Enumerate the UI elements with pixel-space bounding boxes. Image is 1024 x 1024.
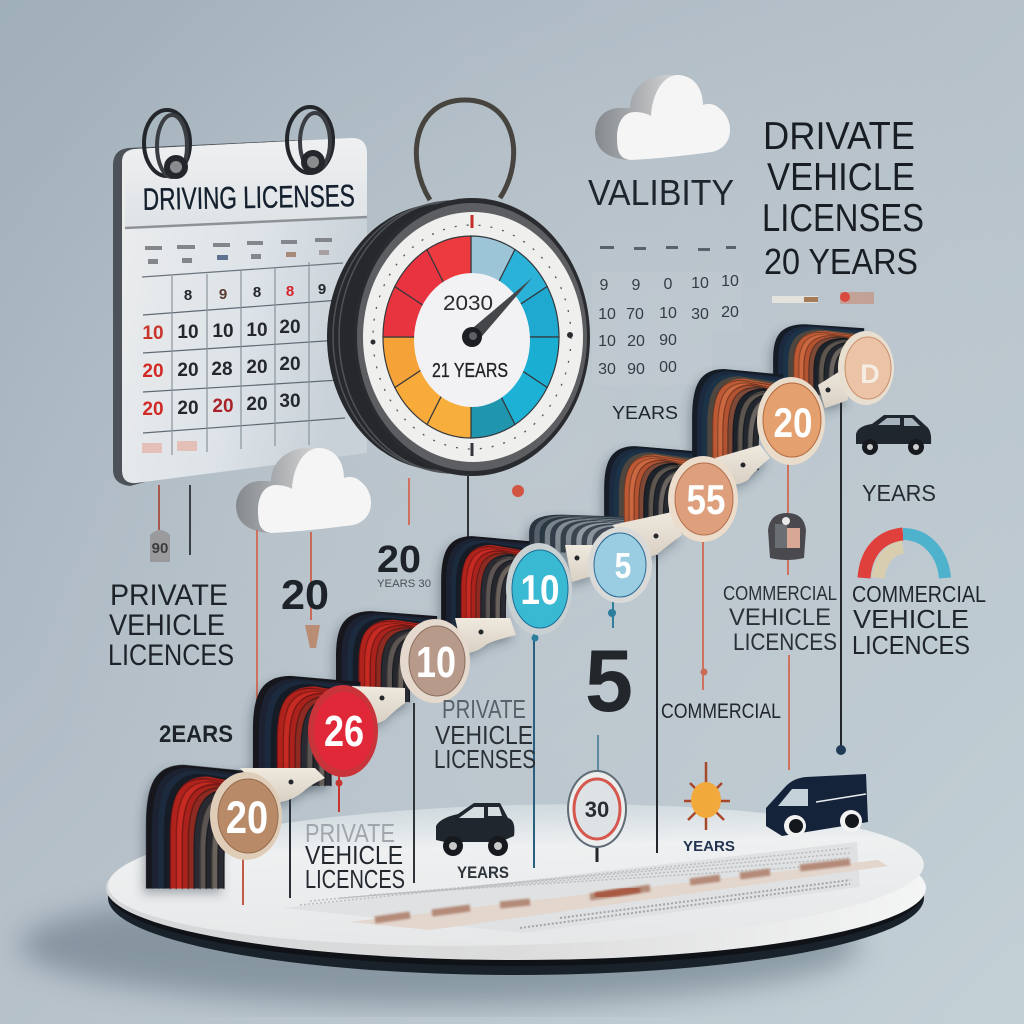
label center private: LICENSES [434, 744, 536, 774]
badges [210, 331, 894, 860]
heading: validity: VALIBITY [588, 172, 734, 213]
badge 5 [588, 527, 652, 603]
calendar numbers: 10 [212, 321, 234, 342]
faint small calendar: 20 [721, 304, 739, 321]
calendar grid [142, 262, 345, 455]
gauge needle [468, 278, 532, 342]
calendar [113, 107, 367, 486]
badge 10 blue [506, 543, 572, 635]
printed sheet on platform [283, 842, 888, 933]
badge 0 [838, 331, 894, 405]
stacked cards [150, 327, 867, 889]
heading: private vehicle licenses 20 years: LICENSES [762, 197, 924, 240]
label 2ears: 2EARS [159, 721, 233, 748]
ribbon 4 [565, 545, 595, 582]
faint small calendar: 30 [598, 361, 616, 378]
calendar numbers: 30 [279, 391, 301, 412]
badge 0: D [860, 359, 880, 389]
faint calendar red dates [142, 441, 197, 453]
icon: car top right [856, 415, 931, 455]
calendar header: DRIVING LICENSES [143, 178, 355, 217]
calendar numbers: 8 [184, 287, 192, 304]
gauge ticks [373, 225, 571, 449]
badge 26 [308, 685, 378, 777]
number 20 center: 20 [377, 539, 421, 581]
label commercial vehicle licences 2: LICENCES [852, 630, 970, 660]
ribbon 2 [352, 686, 405, 724]
calendar header [125, 138, 367, 228]
gauge ring handle [416, 100, 514, 200]
cloud middle [236, 448, 371, 533]
faint small calendar: 10 [598, 333, 616, 350]
icon: sun [684, 762, 730, 830]
calendar numbers: 20 [142, 399, 164, 420]
calendar numbers: 9 [318, 281, 326, 298]
ribbons [240, 368, 848, 803]
badge 55: 55 [687, 477, 725, 524]
faint sign 90: 90 [152, 540, 168, 557]
faint small calendar: 30 [691, 306, 709, 323]
heading: private vehicle licenses 20 years: DRIVATE [763, 115, 915, 158]
heading: private vehicle licenses 20 years: VEHICLE [767, 156, 915, 199]
platform shadow [20, 885, 860, 1005]
calendar numbers: 10 [246, 320, 268, 341]
heading: private vehicle licenses 20 years: 20 YEARS [764, 241, 918, 282]
badge 20 orange: 20 [774, 400, 812, 447]
label commercial vehicle licences 2: VEHICLE [853, 604, 969, 634]
label commercial vehicle licences 1: VEHICLE [729, 604, 831, 631]
calendar numbers: 10 [142, 323, 164, 344]
stack 3 [339, 614, 440, 703]
stopwatch gauge [327, 100, 590, 476]
icon: speed sign: 30 [585, 797, 609, 822]
faint small calendar: 9 [632, 277, 641, 294]
calendar numbers: 20 [279, 354, 301, 375]
badge 20 [210, 772, 282, 860]
faint small calendar: 0 [664, 276, 673, 293]
label: years (top): YEARS [612, 403, 678, 423]
faint small calendar: 20 [627, 333, 645, 350]
number 20 left: 20 [281, 571, 329, 618]
calendar numbers: 20 [246, 394, 268, 415]
left label [108, 579, 234, 672]
calendar numbers: 20 [142, 361, 164, 382]
number 20 center: YEARS 30 [377, 578, 431, 590]
icon: speed sign [567, 770, 627, 848]
faint small calendar: 90 [659, 332, 677, 349]
badge 10 [400, 619, 470, 703]
badge 5: 5 [615, 546, 631, 587]
icon: device [768, 513, 806, 560]
connector pins [305, 485, 846, 786]
calendar numbers: 20 [177, 360, 199, 381]
faint small calendar: 10 [691, 275, 709, 292]
label bottom: LICENCES [305, 864, 405, 894]
icon: van [766, 774, 868, 837]
ribbon 3 [455, 618, 516, 653]
ribbon 5 [612, 512, 682, 556]
calendar numbers: 9 [219, 286, 227, 303]
label bottom [305, 818, 405, 894]
faint small calendar: 10 [659, 305, 677, 322]
left label: VEHICLE [109, 609, 225, 642]
faint sign 90 [150, 530, 170, 562]
ribbon rivets [288, 388, 830, 784]
calendar numbers: 20 [279, 317, 301, 338]
label commercial: COMMERCIAL [661, 700, 781, 723]
stack 6 [607, 449, 695, 535]
badge 10: 10 [416, 639, 456, 687]
faint small calendar: 70 [626, 306, 644, 323]
stack 4 [444, 539, 532, 630]
label years bottom: YEARS [683, 838, 735, 855]
stack 5 [532, 516, 624, 552]
calendar numbers: 20 [177, 398, 199, 419]
label commercial vehicle licences 2: COMMERCIAL [852, 581, 986, 607]
left label: PRIVATE [110, 579, 228, 612]
badge 55 [668, 456, 738, 542]
faint small calendar [592, 246, 742, 385]
faint small calendar: 00 [659, 359, 677, 376]
calendar numbers: 28 [211, 359, 233, 380]
label years right: YEARS [862, 480, 936, 506]
calendar weekday headers [145, 238, 332, 264]
stack 2 [257, 680, 363, 787]
calendar rings [144, 107, 333, 177]
badge 10 blue: 10 [521, 567, 559, 614]
label years platform: YEARS [457, 863, 509, 882]
badge 20: 20 [226, 792, 268, 843]
faint small calendar: 90 [627, 361, 645, 378]
calendar numbers: 10 [177, 322, 199, 343]
gauge dial segments [383, 236, 559, 438]
ribbon 7 [818, 368, 848, 408]
connector lines [159, 400, 841, 905]
faint small calendar: 10 [721, 273, 739, 290]
label commercial vehicle licences 2 [852, 581, 986, 660]
badge 26: 26 [324, 708, 364, 756]
cloud top [595, 75, 730, 160]
calendar numbers: 20 [246, 357, 268, 378]
calendar numbers [142, 281, 326, 420]
label commercial vehicle licences 1: COMMERCIAL [723, 583, 837, 605]
heading: private vehicle licenses 20 years [762, 115, 924, 282]
left label: LICENCES [108, 639, 234, 672]
stack 1 [150, 769, 256, 889]
stack 7 [695, 372, 786, 471]
icon: car centre [436, 803, 514, 856]
badge 20 orange [757, 377, 825, 465]
label center private: PRIVATE [442, 694, 526, 724]
label bottom: VEHICLE [305, 840, 403, 870]
label commercial vehicle licences 1 [723, 583, 837, 656]
label center private: VEHICLE [435, 720, 533, 750]
round platform [106, 794, 926, 975]
label commercial vehicle licences 1: LICENCES [733, 629, 837, 656]
ribbon 6 [715, 445, 770, 484]
calendar numbers: 8 [253, 284, 261, 301]
gauge labels: 2030 [443, 292, 493, 315]
number 20 center [377, 539, 431, 590]
small decorations under heading [772, 292, 874, 304]
label center private [434, 694, 536, 774]
calendar numbers: 8 [286, 283, 294, 300]
stack 8 [776, 327, 867, 396]
ribbon 1 [240, 768, 325, 803]
faint small calendar: 9 [600, 277, 609, 294]
calendar numbers: 20 [212, 396, 234, 417]
stopwatch gauge: 21 YEARS [432, 360, 508, 382]
big number 5: 5 [585, 631, 633, 730]
label bottom: PRIVATE [305, 818, 395, 848]
icon: mini gauge arc [864, 534, 945, 578]
faint small calendar: 10 [598, 306, 616, 323]
